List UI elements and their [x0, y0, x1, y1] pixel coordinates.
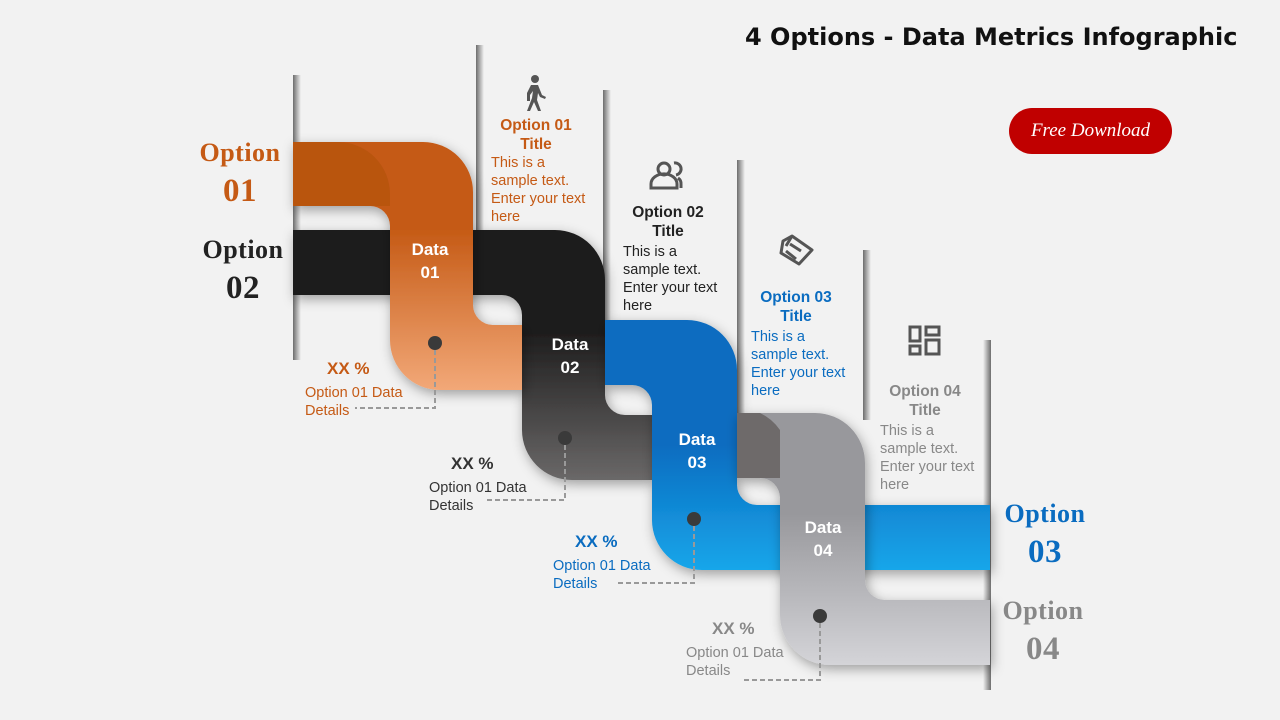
detail: data 04: Option 01 Data — [686, 645, 784, 661]
text: option 03: Title — [780, 308, 812, 325]
detail: data 02: Details — [429, 498, 473, 514]
text: Data — [552, 335, 588, 354]
icon: handshake — [781, 236, 812, 264]
text: option 01: Title — [520, 136, 552, 153]
label: option 01: Option — [199, 138, 281, 167]
data labels: 01 — [421, 263, 439, 282]
text: Data — [679, 430, 715, 449]
ribbon: option 01 orange — [293, 142, 522, 390]
label: option 01: 01 — [223, 173, 257, 209]
label: option 04: 04 — [1026, 631, 1060, 667]
detail: data 02: Option 01 Data — [429, 480, 527, 496]
ribbon: option 04 gray — [737, 413, 990, 665]
label: option 01 — [199, 138, 281, 209]
text: option 03: This is a sample text. Enter your text here — [751, 329, 845, 399]
detail: data 01: Option 01 Data — [305, 385, 403, 401]
label: option 03: 03 — [1028, 534, 1062, 570]
leader: data 04 — [742, 609, 827, 680]
leader: data 01 — [355, 336, 442, 408]
button: free download: Free Download — [1031, 120, 1150, 141]
text: option 02: Title — [652, 223, 684, 240]
text: Data — [805, 518, 841, 537]
text: option 03 — [751, 289, 846, 399]
text: option 01: This is a sample text. Enter your text here — [491, 155, 585, 225]
leader: data 03 — [615, 512, 701, 583]
label: option 02 — [202, 235, 284, 306]
panel shadows — [293, 45, 991, 690]
text: 02 — [561, 358, 579, 377]
button: free download — [1009, 108, 1172, 154]
text: option 01: Option 01 — [500, 117, 572, 134]
detail: data 03: XX % — [575, 532, 618, 551]
detail: data 03 — [553, 532, 651, 592]
detail: data 01: Details — [305, 403, 349, 419]
text: option 03: Option 03 — [760, 289, 832, 306]
ribbon: option 03 blue — [605, 320, 990, 570]
leader: data 02 — [485, 431, 572, 500]
text: option 04 — [880, 383, 974, 493]
ribbon: option 02 black — [293, 230, 652, 480]
detail: data 03: Details — [553, 576, 597, 592]
label: option 04: Option — [1002, 596, 1084, 625]
detail: data 01: XX % — [327, 359, 370, 378]
icon: dashboard — [910, 327, 939, 354]
label: option 03: Option — [1004, 499, 1086, 528]
label: option 02: 02 — [226, 270, 260, 306]
detail: data 01 — [305, 359, 403, 419]
text: option 04: This is a sample text. Enter your text here — [880, 423, 974, 493]
detail: data 04: Details — [686, 663, 730, 679]
detail: data 04 — [686, 619, 784, 679]
text: option 01 — [491, 117, 586, 225]
text: option 02: This is a sample text. Enter your text here — [623, 244, 717, 314]
detail: data 02 — [429, 454, 527, 514]
detail: data 03: Option 01 Data — [553, 558, 651, 574]
detail: data 04: XX % — [712, 619, 755, 638]
icon: walking person — [527, 75, 546, 111]
label: option 03 — [1004, 499, 1086, 570]
text: option 02 — [623, 204, 718, 314]
text: 03 — [688, 453, 706, 472]
data labels — [412, 240, 449, 282]
text: option 04: Title — [909, 402, 941, 419]
label: option 04 — [1002, 596, 1084, 667]
text: option 02: Option 02 — [632, 204, 704, 221]
text: 04 — [814, 541, 832, 560]
label: option 02: Option — [202, 235, 284, 264]
icon: users — [651, 163, 681, 188]
data labels: Data — [412, 240, 448, 259]
text: option 04: Option 04 — [889, 383, 961, 400]
title: 4 Options - Data Metrics Infographic — [745, 23, 1237, 51]
detail: data 02: XX % — [451, 454, 494, 473]
